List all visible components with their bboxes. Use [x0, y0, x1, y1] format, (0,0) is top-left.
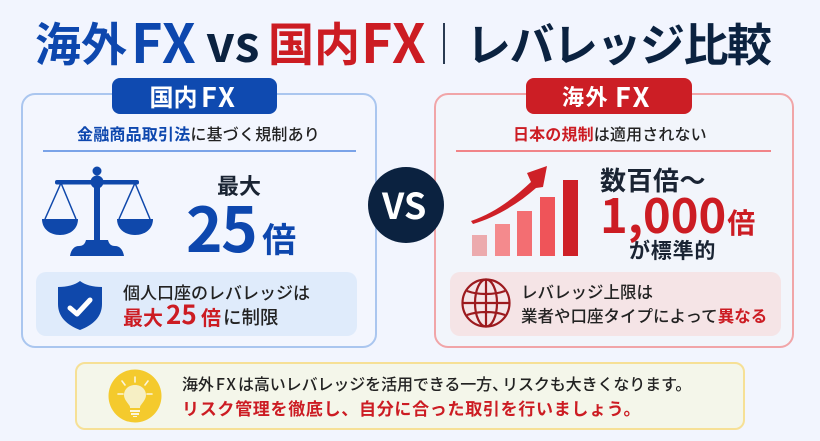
callout text: 個人口座のレバレッジは: [123, 279, 310, 304]
callout: personal account limit: 最大: [123, 302, 163, 331]
callout: personal account limit: [36, 272, 357, 336]
icon: balance scale: [42, 166, 153, 256]
callout text: レバレッジ上限は: [521, 279, 653, 303]
icon: growth bar chart with arrow: [471, 166, 578, 256]
callout: limit differs: [450, 272, 781, 336]
panel: advice note: リスク管理を徹底し、自分に合った取引を行いましょう。: [182, 394, 641, 420]
label: max: 最大: [217, 169, 261, 201]
icon: globe: [461, 278, 511, 328]
subtitle: 日本の規制は適用されない: [513, 121, 707, 145]
divider line: [43, 150, 356, 152]
panel: advice note: [75, 362, 745, 430]
divider line: [456, 150, 771, 152]
note text: 海外FXは高いレバレッジを活用できる一方、リスクも大きくなります。: [182, 371, 691, 395]
title: vs: [206, 5, 260, 77]
value: 1,000x: 1,000倍: [600, 178, 755, 247]
panel header: overseas FX: FX: [615, 76, 652, 115]
panel: domestic FX: [21, 93, 377, 348]
panel header: domestic FX: [112, 78, 277, 114]
callout: personal account limit: 倍: [201, 302, 221, 331]
title: [35, 0, 772, 79]
callout: limit differs: 業者や口座タイプによって異なる: [521, 303, 767, 327]
icon: shield check: [58, 281, 102, 330]
title: 国内: [268, 8, 360, 74]
text: is standard: が標準的: [629, 235, 716, 265]
badge: VS: VS: [382, 178, 426, 230]
panel header: domestic FX: FX: [201, 76, 237, 115]
panel header: overseas FX: 海外: [562, 80, 609, 112]
title: FX: [361, 0, 427, 79]
panel header: overseas FX: [526, 78, 692, 114]
callout: personal account limit: 25: [166, 295, 197, 332]
text: hundreds of times: 数百倍～: [600, 161, 706, 198]
title: 海外: [35, 8, 127, 74]
title: レバレッジ比較: [466, 9, 771, 74]
panel: overseas FX: [434, 93, 794, 348]
title: FX: [131, 0, 197, 79]
panel header: domestic FX: 国内: [150, 78, 198, 113]
icon: light bulb: [108, 370, 162, 422]
badge: VS: [368, 167, 444, 243]
subtitle: 金融商品取引法に基づく規制あり: [77, 121, 320, 145]
callout: personal account limit: に制限: [223, 304, 279, 330]
value: 25x: 25倍: [186, 180, 296, 270]
